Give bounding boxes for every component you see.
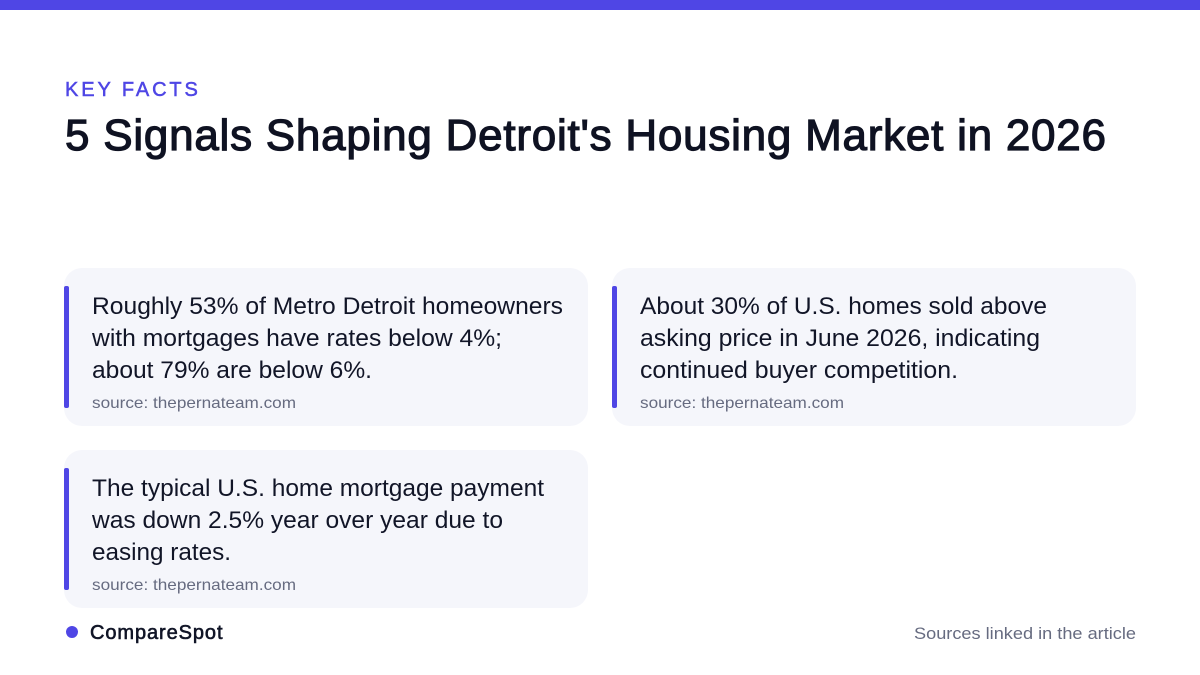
fact text: continued buyer competition. — [640, 357, 958, 384]
brand: comparespot — [66, 622, 223, 644]
fact text: was down 2.5% year over year due to — [91, 507, 503, 534]
panel: homes sold above asking — [612, 268, 1136, 426]
fact text — [91, 475, 544, 566]
source: source: thepernateam.com — [92, 395, 296, 412]
brand name: CompareSpot — [90, 622, 223, 644]
fact text: The typical U.S. home mortgage payment — [92, 475, 544, 502]
footer note: Sources linked in the article — [914, 624, 1136, 643]
fact text: easing rates. — [92, 539, 231, 566]
fact text — [640, 293, 1047, 384]
source: source: thepernateam.com — [92, 577, 296, 594]
fact text: about 79% are below 6%. — [92, 357, 372, 384]
icon: brand dot — [66, 626, 78, 638]
fact text: asking price in June 2026, indicating — [640, 325, 1040, 352]
fact text: About 30% of U.S. homes sold above — [640, 293, 1047, 320]
panel: mortgage payment down — [64, 450, 588, 608]
top accent bar — [0, 0, 1200, 10]
fact text: with mortgages have rates below 4%; — [91, 325, 502, 352]
title: 5 Signals Shaping Detroit's Housing Market in 2026 — [65, 111, 1106, 160]
fact text: Roughly 53% of Metro Detroit homeowners — [92, 293, 563, 320]
source: source: thepernateam.com — [640, 395, 844, 412]
fact text — [91, 293, 563, 384]
eyebrow: key facts: KEY FACTS — [65, 79, 201, 101]
panel: metro detroit mortgage rates — [64, 268, 588, 426]
